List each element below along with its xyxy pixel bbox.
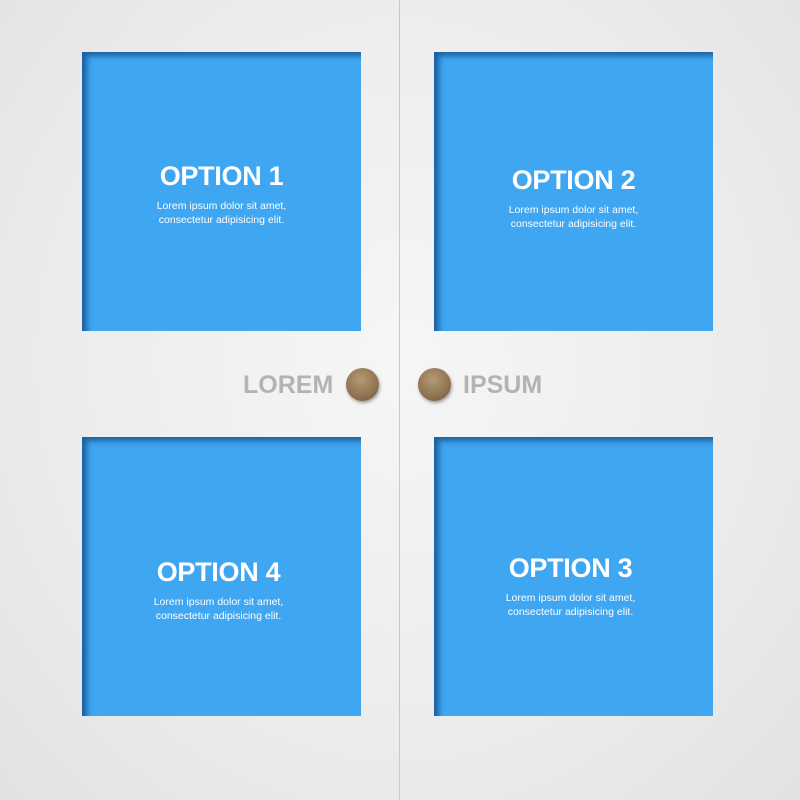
text: option 3 body: Lorem ipsum dolor sit amet, <box>506 592 635 604</box>
text: option 4 body <box>154 596 283 622</box>
panel: option 2 <box>434 52 713 331</box>
text: option 4 body: consectetur adipisicing elit. <box>156 610 281 622</box>
heading: option 4: OPTION 4 <box>157 557 280 587</box>
text: option 4 body: Lorem ipsum dolor sit amet, <box>154 596 283 608</box>
text: option 1 body: Lorem ipsum dolor sit amet, <box>157 200 286 212</box>
text: option 2 body: Lorem ipsum dolor sit amet, <box>509 204 638 216</box>
label: lorem: LOREM <box>243 371 333 399</box>
label: ipsum: IPSUM <box>463 371 542 399</box>
text: option 2 body <box>509 204 638 230</box>
heading: option 1: OPTION 1 <box>160 161 283 191</box>
panel: option 4 <box>82 437 361 716</box>
icon: right knob <box>418 368 451 401</box>
text: option 1 body <box>157 200 286 226</box>
text: option 3 body <box>506 592 635 618</box>
text: option 2 body: consectetur adipisicing elit. <box>511 218 636 230</box>
text: option 1 body: consectetur adipisicing elit. <box>159 214 284 226</box>
heading: option 3: OPTION 3 <box>509 553 632 583</box>
heading: option 2: OPTION 2 <box>512 165 635 195</box>
panel: option 3 <box>434 437 713 716</box>
icon: left knob <box>346 368 379 401</box>
text: option 3 body: consectetur adipisicing elit. <box>508 606 633 618</box>
panel: option 1 <box>82 52 361 331</box>
